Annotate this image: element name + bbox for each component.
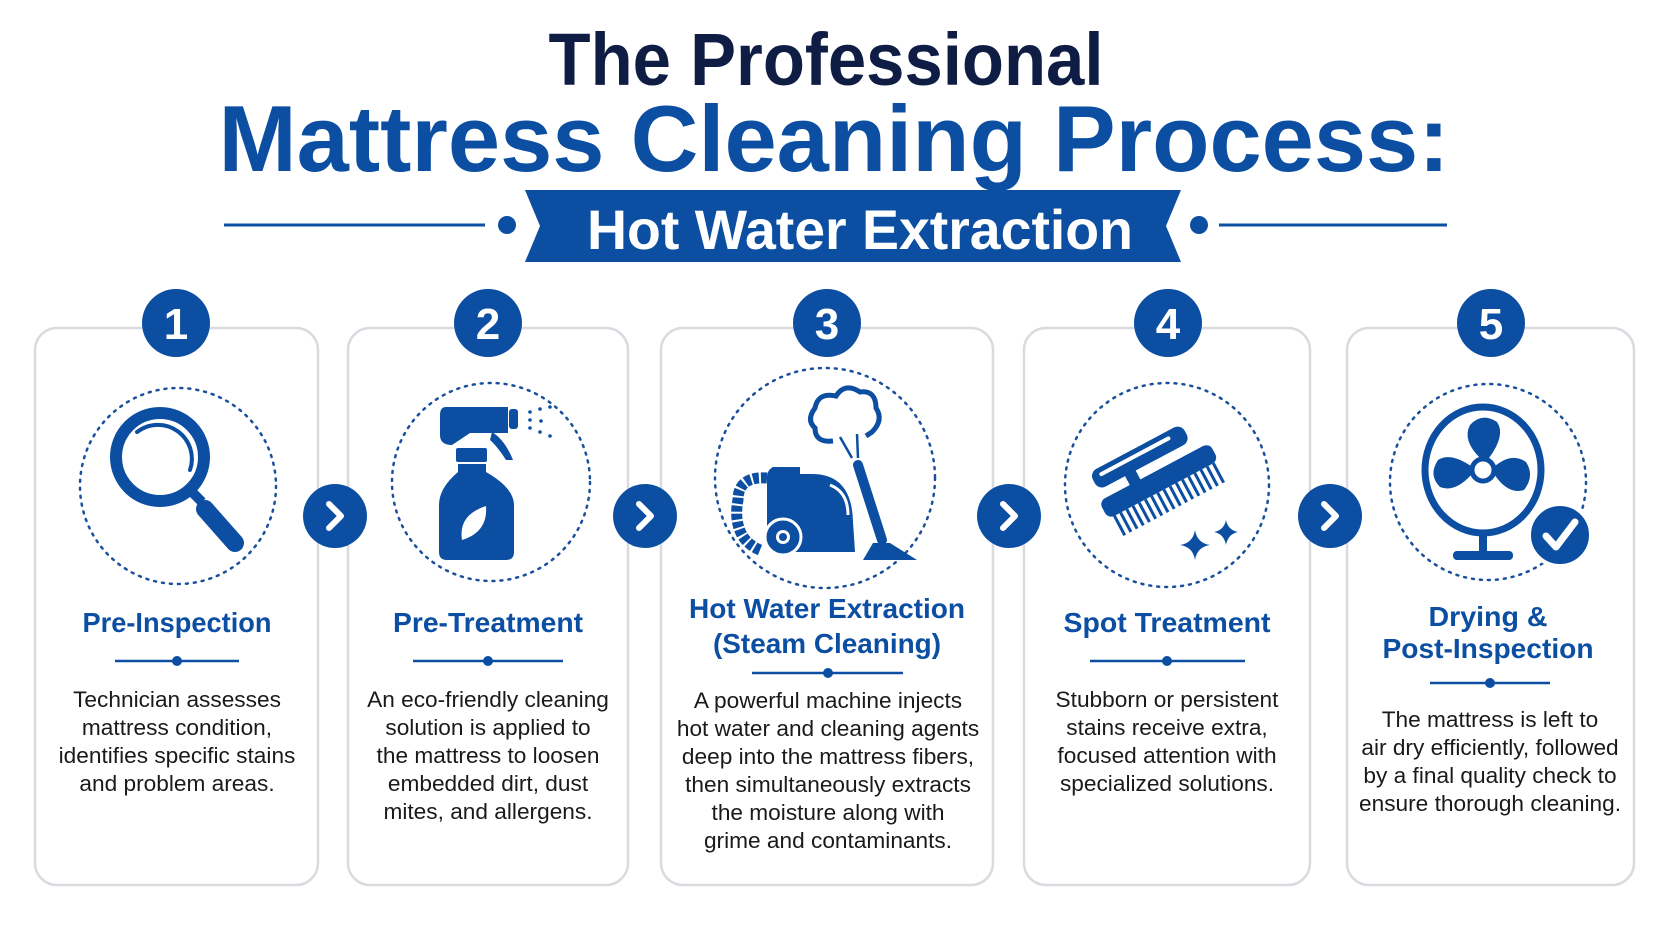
arrow: 4 to 5 xyxy=(1298,484,1362,548)
subtitle banner: Hot Water Extraction xyxy=(587,198,1133,261)
heading: pre-inspection: Pre-Inspection xyxy=(82,607,272,638)
text: step 5 description xyxy=(1359,707,1621,816)
arrow: 1 to 2 xyxy=(303,484,367,548)
icon: spray bottle xyxy=(439,405,552,560)
panel: step 2 pre-treatment xyxy=(348,289,628,885)
icon: magnifying glass xyxy=(116,413,235,543)
panel: step 4 spot treatment xyxy=(1024,289,1310,885)
text: step 1 description: Technician assesses xyxy=(73,687,281,712)
text: step 5 description: air dry efficiently, followed xyxy=(1361,735,1619,760)
title line 1: The Professional xyxy=(548,18,1104,101)
heading: hot water extraction (steam cleaning) xyxy=(689,593,965,659)
text: step 2 description xyxy=(367,687,609,824)
number badge 4 xyxy=(1134,289,1202,357)
text: step 4 description: focused attention with xyxy=(1057,743,1277,768)
icon: fan with check xyxy=(1425,407,1591,566)
number badge 1: 1 xyxy=(164,300,188,349)
text: step 2 description: solution is applied to xyxy=(385,715,591,740)
heading: spot treatment: Spot Treatment xyxy=(1064,607,1270,638)
heading: hot water extraction (steam cleaning): Hot Water Extraction xyxy=(689,593,965,624)
text: step 5 description: ensure thorough cleaning. xyxy=(1359,791,1621,816)
text: step 3 description: the moisture along with xyxy=(712,800,944,825)
heading: drying & post-inspection: Drying & xyxy=(1428,601,1548,632)
text: step 2 description: An eco-friendly cleaning xyxy=(367,687,609,712)
heading: drying & post-inspection xyxy=(1382,601,1594,664)
text: step 5 description: by a final quality check to xyxy=(1363,763,1617,788)
heading: hot water extraction (steam cleaning): (Steam Cleaning) xyxy=(713,628,941,659)
text: step 4 description xyxy=(1056,687,1279,796)
number badge 3 xyxy=(793,289,861,357)
text: step 3 description: then simultaneously extracts xyxy=(685,772,971,797)
icon: steam cleaner xyxy=(737,388,917,560)
text: step 3 description xyxy=(677,688,979,853)
number badge 5: 5 xyxy=(1479,300,1503,349)
panel: step 5 drying & post-inspection xyxy=(1347,289,1634,885)
text: step 4 description: Stubborn or persistent xyxy=(1056,687,1279,712)
number badge 4: 4 xyxy=(1156,300,1181,349)
text: step 3 description: hot water and cleaning agents xyxy=(677,716,979,741)
heading: drying & post-inspection: Post-Inspection xyxy=(1382,633,1594,664)
text: step 1 description xyxy=(59,687,295,796)
number badge 5 xyxy=(1457,289,1525,357)
arrow: 3 to 4 xyxy=(977,484,1041,548)
text: step 1 description: identifies specific stains xyxy=(59,743,295,768)
number badge 2: 2 xyxy=(476,300,500,349)
panel: step 3 hot water extraction xyxy=(661,289,993,885)
subtitle banner xyxy=(224,190,1447,262)
text: step 2 description: mites, and allergens. xyxy=(383,799,593,824)
number badge 3: 3 xyxy=(815,300,839,349)
text: step 2 description: embedded dirt, dust xyxy=(388,771,589,796)
text: step 3 description: deep into the mattress fibers, xyxy=(682,744,974,769)
text: step 3 description: A powerful machine injects xyxy=(694,688,962,713)
text: step 5 description: The mattress is left to xyxy=(1382,707,1598,732)
heading: pre-treatment: Pre-Treatment xyxy=(393,607,583,638)
number badge 1 xyxy=(142,289,210,357)
text: step 2 description: the mattress to loosen xyxy=(377,743,599,768)
icon: scrub brush with sparkles xyxy=(1085,416,1238,560)
text: step 4 description: stains receive extra, xyxy=(1066,715,1268,740)
number badge 2 xyxy=(454,289,522,357)
text: step 1 description: mattress condition, xyxy=(82,715,272,740)
title line 2: Mattress Cleaning Process: xyxy=(218,86,1450,191)
arrow: 2 to 3 xyxy=(613,484,677,548)
panel: step 1 pre-inspection xyxy=(35,289,318,885)
text: step 1 description: and problem areas. xyxy=(79,771,275,796)
text: step 4 description: specialized solutions. xyxy=(1060,771,1274,796)
text: step 3 description: grime and contaminants. xyxy=(704,828,952,853)
